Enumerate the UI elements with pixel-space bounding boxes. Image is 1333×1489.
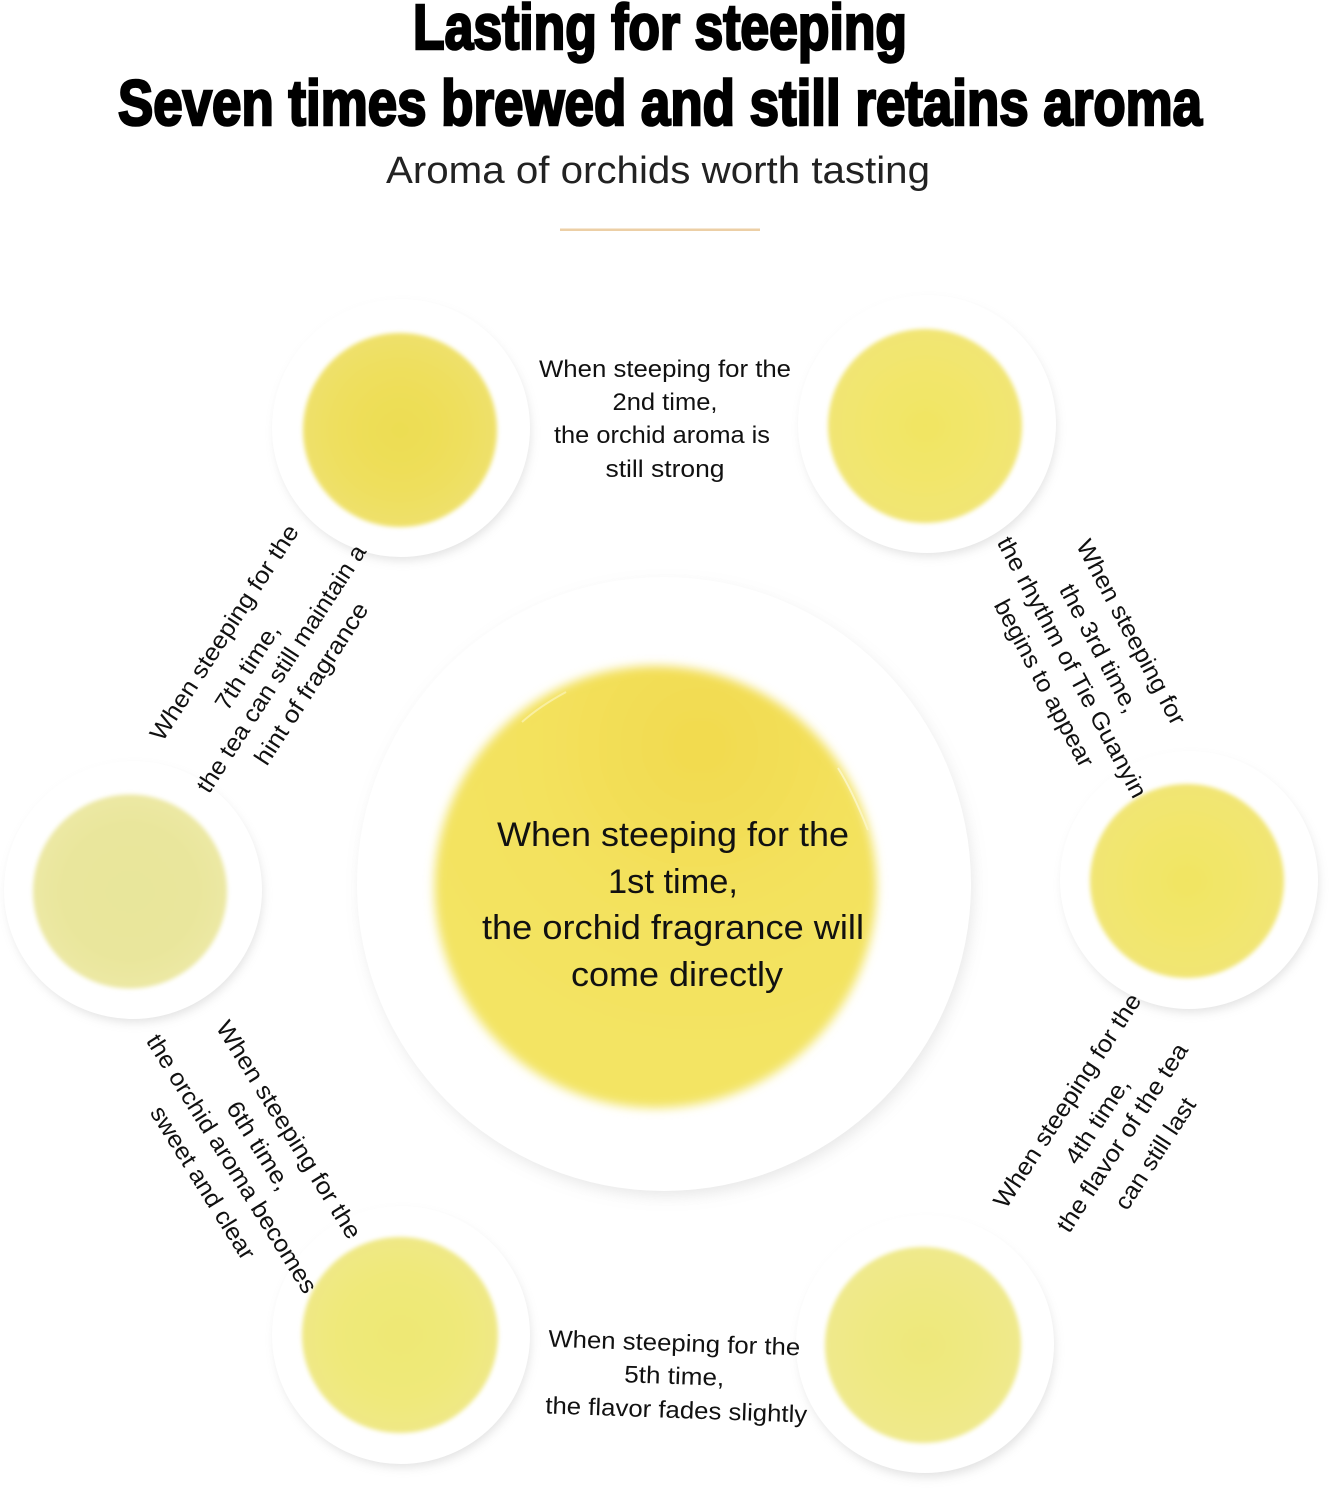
cup: 6th steeping bbox=[272, 1206, 530, 1467]
label: 3rd steeping: begins to appear bbox=[988, 595, 1099, 772]
label: 2nd steeping: still strong bbox=[606, 456, 724, 483]
label: 7th steeping bbox=[145, 520, 374, 798]
label: 5th steeping: 5th time, bbox=[624, 1361, 725, 1392]
subtitle: Aroma of orchids worth tasting bbox=[386, 150, 930, 192]
label: 3rd steeping: the 3rd time, bbox=[1053, 579, 1144, 718]
label: 2nd steeping bbox=[539, 356, 791, 483]
label: 7th steeping: When steeping for the bbox=[145, 520, 305, 746]
cup: 1st steeping (center) bbox=[357, 577, 972, 1195]
label: 4th steeping: 4th time, bbox=[1060, 1072, 1136, 1169]
label: 6th steeping: When steeping for the bbox=[210, 1016, 367, 1244]
cup: 3rd steeping bbox=[798, 295, 1056, 556]
cup: 5th steeping bbox=[796, 1215, 1054, 1477]
label: 1st steeping bbox=[482, 816, 864, 994]
cup: 4th steeping bbox=[1060, 751, 1318, 1012]
label: 3rd steeping: When steeping for bbox=[1070, 535, 1191, 730]
label: 2nd steeping: When steeping for the bbox=[539, 356, 791, 383]
title bbox=[118, 0, 1202, 139]
divider bbox=[560, 228, 760, 231]
label: 7th steeping: 7th time, bbox=[210, 618, 286, 715]
label: 6th steeping bbox=[140, 1016, 367, 1298]
label: 4th steeping: the flavor of the tea bbox=[1051, 1038, 1194, 1238]
label: 5th steeping bbox=[545, 1326, 808, 1429]
label: 4th steeping bbox=[988, 989, 1202, 1238]
cup: 7th steeping bbox=[4, 761, 262, 1022]
label: 1st steeping: the orchid fragrance will bbox=[482, 909, 864, 947]
label: 6th steeping: the orchid aroma becomes bbox=[140, 1030, 322, 1298]
label: 5th steeping: the flavor fades slightly bbox=[545, 1392, 808, 1429]
label: 3rd steeping: the rhythm of Tie Guanyin bbox=[991, 532, 1152, 803]
label: 4th steeping: When steeping for the bbox=[988, 989, 1147, 1213]
label: 4th steeping: can still last bbox=[1110, 1093, 1202, 1215]
label: 6th steeping: sweet and clear bbox=[144, 1101, 260, 1265]
label: 1st steeping: When steeping for the bbox=[497, 816, 849, 854]
label: 2nd steeping: 2nd time, bbox=[612, 389, 718, 416]
cup: 2nd steeping bbox=[272, 299, 530, 560]
label: 2nd steeping: the orchid aroma is bbox=[554, 422, 770, 449]
label: 5th steeping: When steeping for the bbox=[548, 1326, 801, 1361]
label: 7th steeping: hint of fragrance bbox=[249, 598, 374, 770]
label: 1st steeping: come directly bbox=[571, 956, 783, 994]
label: 6th steeping: 6th time, bbox=[220, 1096, 296, 1196]
label: 1st steeping: 1st time, bbox=[608, 863, 738, 901]
label: 7th steeping: the tea can still maintain a bbox=[191, 539, 372, 798]
